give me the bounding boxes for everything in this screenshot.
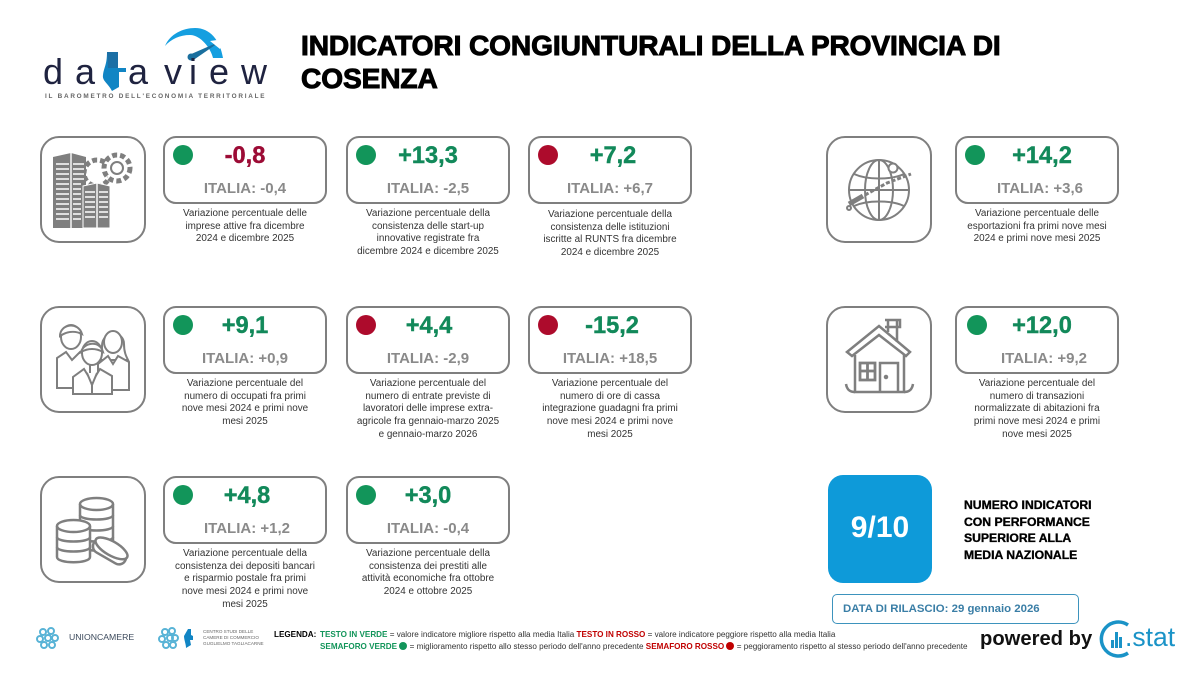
text: score caption: CON PERFORMANCE xyxy=(964,514,1090,528)
card: depositi bancari xyxy=(163,476,327,610)
legend xyxy=(274,630,968,651)
card: prestiti xyxy=(346,476,510,597)
card: istituzioni RUNTS: ITALIA: +6,7 xyxy=(567,180,653,197)
legend row: semaforo: SEMAFORO VERDE = miglioramento rispetto allo stesso periodo dell'anno precedente SEMAFORO ROSSO = peggioramento rispetto al stesso periodo dell'anno precedente xyxy=(320,642,968,651)
text: 2024 e ottobre 2025 xyxy=(384,586,472,597)
text: Variazione percentuale della xyxy=(548,209,672,220)
text: Variazione percentuale delle xyxy=(183,208,307,219)
text: Variazione percentuale della xyxy=(366,548,490,559)
text: score caption: SUPERIORE ALLA xyxy=(964,531,1071,545)
text: numero di occupati fra primi xyxy=(184,391,306,402)
logo wordmark xyxy=(43,51,268,92)
text: imprese attive fra dicembre xyxy=(185,221,305,232)
text: Variazione percentuale del xyxy=(370,378,486,389)
card: entrate previste: ITALIA: -2,9 xyxy=(387,350,469,367)
text: 2024 e dicembre 2025 xyxy=(196,233,294,244)
callout: 9/10 score: 9/10 xyxy=(851,511,909,544)
card: cassa integrazione xyxy=(528,306,692,440)
title: COSENZA xyxy=(301,63,438,94)
text: numero di transazioni xyxy=(990,391,1084,402)
text: attività economiche fra ottobre xyxy=(362,573,494,584)
text: innovative registrate fra xyxy=(377,233,479,244)
icon: gauge arc xyxy=(165,28,224,61)
legend label: LEGENDA: xyxy=(274,630,316,639)
text: consistenza dei prestiti alle xyxy=(369,561,487,572)
logo: centro studi tagliacarne: GUGLIELMO TAGLIACARNE xyxy=(203,641,264,646)
text: mesi 2025 xyxy=(587,429,633,440)
logo: dataview xyxy=(43,28,268,100)
logo: dataview: d xyxy=(43,51,63,92)
text: consistenza delle istituzioni xyxy=(550,222,670,233)
legend row: testo: TESTO IN VERDE = valore indicatore migliore rispetto alla media Italia TESTO IN ROSSO = valore indicatore peggiore rispetto alla media Italia xyxy=(320,630,835,639)
card: istituzioni RUNTS: +7,2 xyxy=(590,143,636,169)
logo tagline: IL BAROMETRO DELL'ECONOMIA TERRITORIALE xyxy=(45,93,266,100)
card: imprese attive xyxy=(163,136,327,244)
text: score caption: NUMERO INDICATORI xyxy=(964,498,1092,512)
card: prestiti: +3,0 xyxy=(405,483,451,509)
logo: dataview: i xyxy=(189,51,197,92)
text: esportazioni fra primi nove mesi xyxy=(967,221,1107,232)
icon: calabria t mark xyxy=(103,52,126,91)
text: lavoratori delle imprese extra- xyxy=(363,403,493,414)
release date box: DATA DI RILASCIO: 29 gennaio 2026 xyxy=(843,603,1040,615)
text: agricole fra gennaio-marzo 2025 xyxy=(357,416,499,427)
card: cassa integrazione: -15,2 xyxy=(585,313,639,339)
card: cassa integrazione: ITALIA: +18,5 xyxy=(563,350,657,367)
icon panel: credito xyxy=(40,476,146,583)
text: e gennaio-marzo 2026 xyxy=(379,429,477,440)
text: iscritte al RUNTS fra dicembre xyxy=(543,234,677,245)
icon panel: export xyxy=(826,136,932,243)
text: normalizzate di abitazioni fra xyxy=(974,403,1100,414)
card: start-up innovative: +13,3 xyxy=(398,143,458,169)
logo: dataview: v xyxy=(164,51,182,92)
card: occupati: ITALIA: +0,9 xyxy=(202,350,288,367)
card: transazioni abitazioni xyxy=(955,306,1119,440)
title: INDICATORI CONGIUNTURALI DELLA PROVINCIA DI xyxy=(301,30,1001,61)
text: nove mesi 2025 xyxy=(1002,429,1072,440)
logo: powered by c.stat xyxy=(980,620,1175,658)
card: start-up innovative xyxy=(346,136,510,257)
card: prestiti: ITALIA: -0,4 xyxy=(387,520,469,537)
card: imprese attive: -0,8 xyxy=(225,143,265,169)
text: numero di entrate previste di xyxy=(365,391,491,402)
text: 2024 e dicembre 2025 xyxy=(561,247,659,258)
text: score caption xyxy=(964,498,1092,562)
logo: centro studi tagliacarne: CAMERE DI COMMERCIO xyxy=(203,635,259,640)
title xyxy=(301,30,1001,94)
card: esportazioni: ITALIA: +3,6 xyxy=(997,180,1083,197)
text: integrazione guadagni fra primi xyxy=(542,403,678,414)
card: transazioni abitazioni: ITALIA: +9,2 xyxy=(1001,350,1087,367)
text: nove mesi 2024 e primi nove xyxy=(182,586,308,597)
card: esportazioni xyxy=(955,136,1119,244)
card: istituzioni RUNTS xyxy=(528,136,692,258)
icon panel: abitazioni xyxy=(826,306,932,413)
text: mesi 2025 xyxy=(222,416,268,427)
card: depositi bancari: ITALIA: +1,2 xyxy=(204,520,290,537)
card: depositi bancari: +4,8 xyxy=(224,483,270,509)
text: 2024 e primi nove mesi 2025 xyxy=(974,233,1100,244)
card: occupati: +9,1 xyxy=(222,313,268,339)
text: consistenza delle start-up xyxy=(372,221,484,232)
text: dicembre 2024 e dicembre 2025 xyxy=(357,246,499,257)
card: entrate previste xyxy=(346,306,510,440)
text: Variazione percentuale del xyxy=(187,378,303,389)
logo: dataview: w xyxy=(241,51,267,92)
text: Variazione percentuale del xyxy=(979,378,1095,389)
text: nove mesi 2024 e primi nove xyxy=(182,403,308,414)
card: esportazioni: +14,2 xyxy=(1012,143,1072,169)
logo: dataview: a xyxy=(128,51,148,92)
text: e risparmio postale fra primi xyxy=(184,573,306,584)
text: powered by: powered by xyxy=(980,628,1092,650)
release date box xyxy=(832,594,1079,624)
text: Variazione percentuale del xyxy=(552,378,668,389)
text: Variazione percentuale della xyxy=(183,548,307,559)
logo: unioncamere xyxy=(36,627,134,649)
icon: c.stat mark xyxy=(1100,620,1129,658)
text: primi nove mesi 2024 e primi xyxy=(974,416,1100,427)
text: .stat: .stat xyxy=(1125,622,1175,652)
text: Variazione percentuale della xyxy=(366,208,490,219)
logo: unioncamere: UNIONCAMERE xyxy=(69,632,134,642)
card: transazioni abitazioni: +12,0 xyxy=(1012,313,1072,339)
text: mesi 2025 xyxy=(222,599,268,610)
icon panel: imprese xyxy=(40,136,146,243)
text: consistenza dei depositi bancari xyxy=(175,561,315,572)
icon panel: occupati xyxy=(40,306,146,413)
callout: 9/10 score xyxy=(828,475,932,583)
card: occupati xyxy=(163,306,327,427)
logo: dataview: a xyxy=(75,51,95,92)
card: entrate previste: +4,4 xyxy=(406,313,452,339)
logo: centro studi tagliacarne xyxy=(158,627,264,649)
logo: dataview: e xyxy=(209,51,229,92)
card: start-up innovative: ITALIA: -2,5 xyxy=(387,180,469,197)
logo: centro studi tagliacarne: CENTRO STUDI DELLE xyxy=(203,629,253,634)
text: numero di ore di cassa xyxy=(560,391,660,402)
card: imprese attive: ITALIA: -0,4 xyxy=(204,180,286,197)
text: Variazione percentuale delle xyxy=(975,208,1099,219)
text: nove mesi 2024 e primi nove xyxy=(547,416,673,427)
text: score caption: MEDIA NAZIONALE xyxy=(964,548,1077,562)
